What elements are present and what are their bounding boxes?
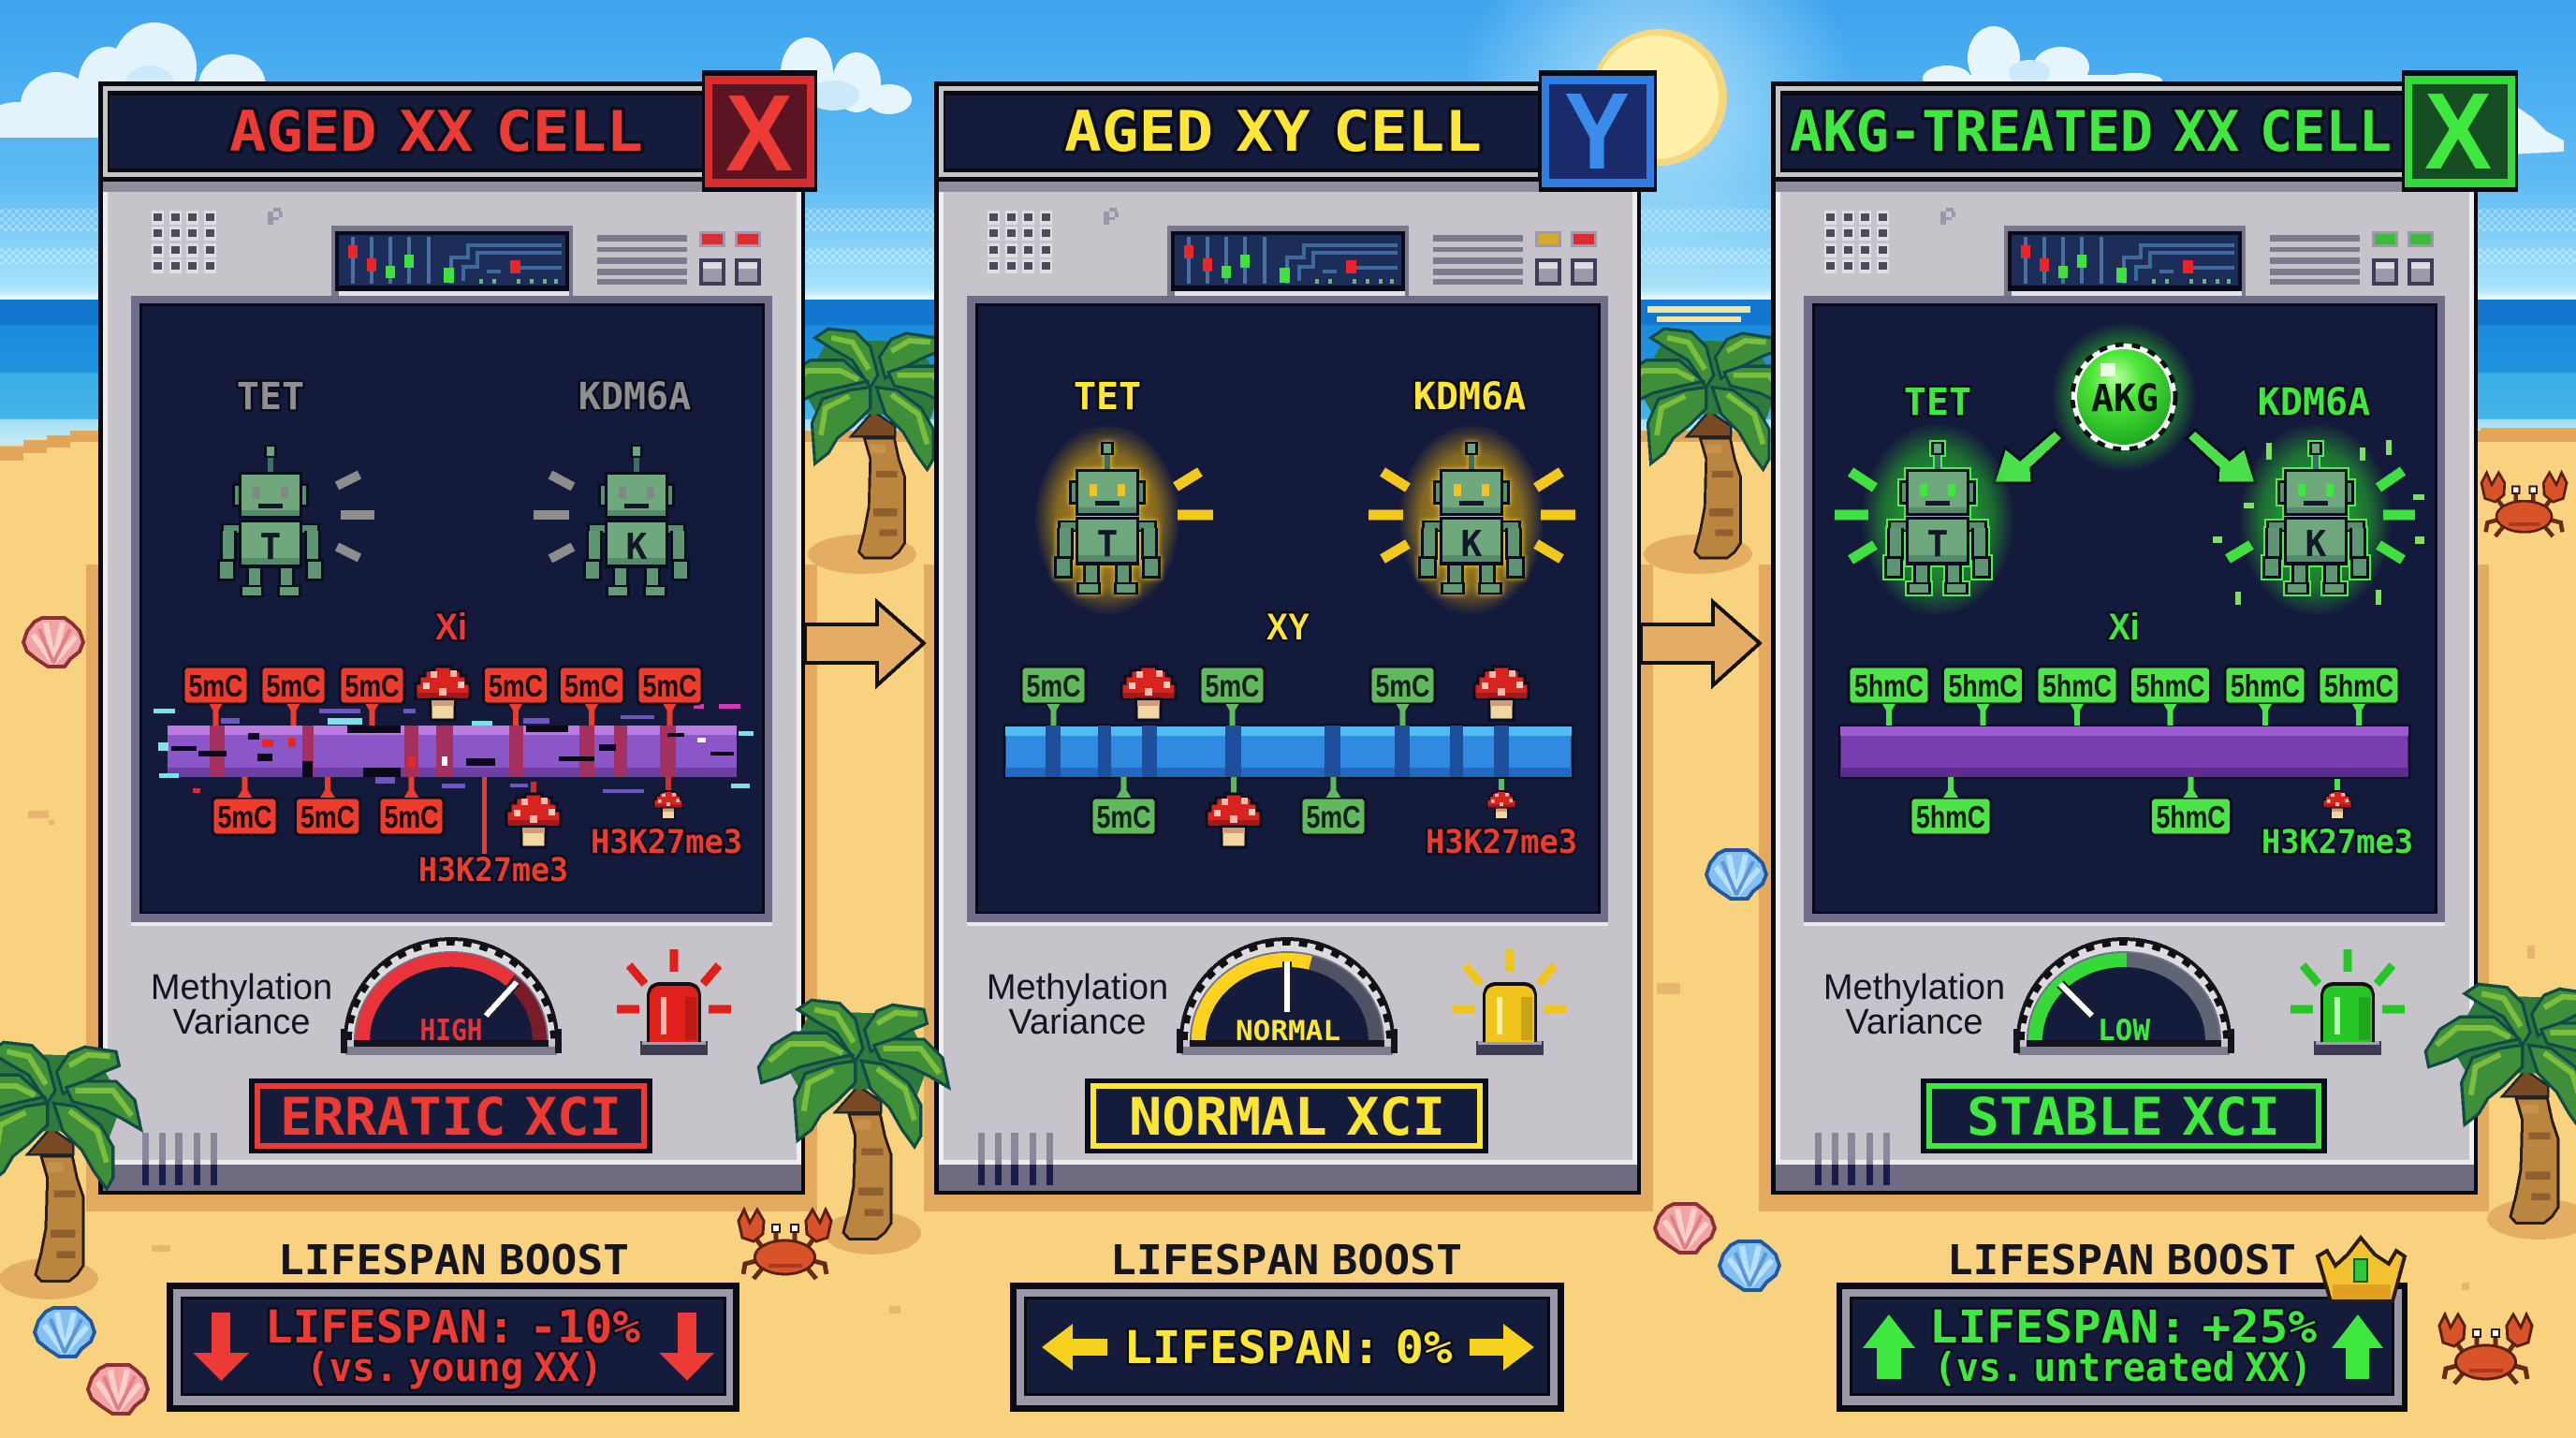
crab: right lower — [2439, 1314, 2532, 1384]
robot: TET — [1861, 422, 2014, 617]
top 5mC tags and mushroom: 5mC — [564, 668, 619, 703]
top 5mC tags and mushroom: 5mC — [189, 668, 243, 703]
label: methylation variance — [151, 968, 332, 1042]
robot: KDM6A — [1398, 424, 1544, 615]
status LEDs — [2372, 231, 2434, 247]
label: methylation variance: Methylation — [1823, 968, 2005, 1007]
shell: pink lower left — [88, 1365, 148, 1414]
alarm lamp: green — [2291, 949, 2405, 1055]
title bar — [934, 81, 1543, 182]
status: normal XCI: NORMAL XCI — [1129, 1087, 1445, 1147]
panel: AKG-treated XX cell — [1771, 70, 2518, 1412]
bottom 5mC tags, mushrooms and H3K27me3 labels — [212, 777, 742, 889]
title text: AKG-TREATED XX CELL — [1790, 99, 2392, 165]
label: methylation variance: Variance — [172, 1003, 311, 1042]
weak activity rays — [337, 475, 573, 559]
badge: X — [2402, 70, 2518, 192]
panel chassis — [1771, 178, 2478, 1195]
heading: lifespan boost: LIFESPAN BOOST — [1947, 1237, 2296, 1284]
AKG orb: AKG — [2091, 377, 2159, 420]
palm tree: foreground left — [0, 1042, 141, 1299]
label: methylation variance — [1823, 968, 2005, 1042]
shell: blue centre right — [1706, 850, 1766, 899]
label: methylation variance — [987, 968, 1168, 1042]
panel: aged XX cell — [98, 70, 817, 1412]
badge: Y — [1539, 70, 1657, 192]
cloud: top centre-left — [769, 37, 912, 114]
arrow: panel 2 to panel 3 — [1641, 602, 1760, 685]
gauge: normal: NORMAL — [1236, 1015, 1340, 1047]
bottom 5mC tags, mushrooms and H3K27me3 labels: 5mC — [300, 800, 355, 834]
enzyme label: KDM6A: KDM6A — [1413, 375, 1526, 418]
glitched chromosome bar — [154, 704, 754, 793]
arrow: AKG to KDM6A — [2187, 430, 2256, 483]
top 5mC tags and mushroom: 5mC — [489, 668, 543, 703]
chromosome label: XY: XY — [1266, 607, 1310, 648]
robot: TET: T — [260, 526, 281, 567]
enzyme label: TET: TET — [1904, 381, 1971, 424]
robot: KDM6A: K — [2305, 523, 2327, 565]
icon: crown — [2318, 1238, 2405, 1301]
panel: aged XY cell — [934, 70, 1657, 1412]
top 5mC tags and mushroom: 5mC — [344, 668, 399, 703]
top 5hmC tags: 5hmC — [2042, 668, 2112, 703]
sand specks — [28, 811, 2535, 1313]
lifespan readout: LIFESPAN: 0% — [1123, 1322, 1453, 1374]
bottom 5mC tags, mushrooms and H3K27me3 label: 5mC — [1307, 800, 1361, 834]
panel ground shadows — [86, 565, 2489, 1211]
top 5mC tags and mushrooms: 5mC — [1206, 668, 1260, 703]
bottom 5mC tags, mushrooms and H3K27me3 labels: H3K27me3 — [591, 824, 742, 861]
bottom 5hmC tags, mushroom and H3K27me3 label: 5hmC — [1916, 800, 1985, 834]
top 5hmC tags: 5hmC — [2231, 668, 2300, 703]
lifespan readout — [167, 1283, 739, 1412]
status: stable XCI — [1921, 1078, 2327, 1153]
enzyme label: KDM6A: KDM6A — [578, 375, 691, 418]
lifespan readout: LIFESPAN: -10% — [265, 1301, 640, 1354]
alarm lamp: yellow — [1453, 949, 1567, 1055]
status: erratic XCI: ERRATIC XCI — [280, 1087, 622, 1147]
chromosome label: Xi: Xi — [435, 607, 467, 648]
label: methylation variance: Variance — [1008, 1003, 1147, 1042]
palm tree: behind panels left — [778, 329, 960, 574]
chromosome bar: purple — [1839, 726, 2409, 777]
robot: TET — [1034, 424, 1180, 615]
robot: KDM6A: K — [626, 526, 648, 567]
robot: TET — [217, 445, 324, 597]
bottom 5mC tags, mushrooms and H3K27me3 label — [1091, 777, 1577, 861]
label: methylation variance: Methylation — [151, 968, 332, 1007]
palm tree: behind panels right — [1614, 329, 1796, 574]
alarm lamp: red — [617, 949, 731, 1055]
bottom 5mC tags, mushrooms and H3K27me3 labels: 5mC — [384, 800, 438, 834]
bottom 5hmC tags, mushroom and H3K27me3 label — [1910, 777, 2413, 861]
panel chassis — [98, 178, 805, 1195]
heading: lifespan boost: LIFESPAN BOOST — [278, 1237, 629, 1284]
status LEDs — [1535, 231, 1597, 247]
bottom 5hmC tags, mushroom and H3K27me3 label: 5hmC — [2157, 800, 2226, 834]
bottom 5hmC tags, mushroom and H3K27me3 label: H3K27me3 — [2261, 824, 2413, 861]
top 5hmC tags — [1849, 667, 2399, 726]
panel chassis — [934, 178, 1641, 1195]
robot: TET: T — [1927, 523, 1948, 565]
status LEDs — [699, 231, 761, 247]
status: stable XCI: STABLE XCI — [1967, 1087, 2280, 1147]
bottom 5mC tags, mushrooms and H3K27me3 labels: H3K27me3 — [418, 852, 568, 889]
label: methylation variance: Variance — [1845, 1003, 1983, 1042]
background: sky — [0, 0, 2576, 297]
gauge: normal — [1177, 937, 1398, 1055]
enzyme label: TET: TET — [1074, 375, 1141, 418]
status: erratic XCI — [249, 1078, 652, 1153]
enzyme label: TET: TET — [237, 375, 304, 418]
lifespan readout — [1010, 1283, 1564, 1412]
gauge: high: HIGH — [419, 1014, 483, 1048]
robot: KDM6A — [583, 445, 690, 597]
top 5mC tags and mushroom: 5mC — [266, 668, 320, 703]
palm tree: foreground right — [2425, 984, 2576, 1240]
enzyme label: KDM6A: KDM6A — [2258, 381, 2370, 424]
label: methylation variance: Methylation — [987, 968, 1168, 1007]
gauge: high — [341, 937, 562, 1055]
top 5hmC tags: 5hmC — [1854, 668, 1924, 703]
shell: blue lower left — [35, 1308, 95, 1357]
robot: TET: T — [1097, 523, 1118, 565]
shell: blue centre bottom — [1720, 1241, 1779, 1290]
shell: pink centre bottom — [1655, 1204, 1715, 1253]
cloud: top right — [1923, 26, 2162, 92]
crab: right upper — [2481, 473, 2567, 536]
top 5mC tags and mushrooms: 5mC — [1026, 668, 1080, 703]
gauge: low — [2013, 937, 2234, 1055]
title bar — [1771, 81, 2408, 182]
top 5mC tags and mushroom: 5mC — [642, 668, 696, 703]
arrow: panel 1 to panel 2 — [805, 602, 924, 685]
activity rays and sparks — [1835, 440, 2424, 605]
sea — [0, 300, 2576, 445]
activity rays — [1176, 472, 1575, 559]
top 5hmC tags: 5hmC — [2136, 668, 2205, 703]
palm tree: foreground centre — [758, 1000, 949, 1255]
heading: lifespan boost: LIFESPAN BOOST — [1110, 1237, 1462, 1284]
crab: centre — [739, 1210, 831, 1279]
bottom 5mC tags, mushrooms and H3K27me3 label: H3K27me3 — [1426, 824, 1577, 861]
robot: KDM6A: K — [1461, 523, 1483, 565]
horizon line — [0, 296, 2576, 301]
top 5mC tags and mushrooms: 5mC — [1376, 668, 1430, 703]
badge: X: X — [2424, 70, 2492, 192]
sun reflection on sea — [1647, 306, 1750, 322]
bottom 5mC tags, mushrooms and H3K27me3 labels: 5mC — [217, 800, 271, 834]
cloud: top left — [0, 22, 271, 138]
sand — [0, 428, 2576, 1438]
sand beach body — [0, 442, 2576, 1438]
badge: X: X — [725, 72, 793, 194]
arrow: AKG to TET — [1994, 430, 2063, 483]
chromosome label: Xi: Xi — [2108, 607, 2140, 648]
AKG orb — [2051, 322, 2197, 472]
bottom 5mC tags, mushrooms and H3K27me3 label: 5mC — [1097, 800, 1151, 834]
lifespan readout: (vs. untreated XX) — [1934, 1344, 2312, 1390]
lifespan readout: LIFESPAN: +25% — [1929, 1301, 2317, 1354]
title text: AGED XY CELL — [1064, 99, 1482, 165]
status: normal XCI — [1085, 1078, 1488, 1153]
top 5mC tags and mushroom — [183, 667, 702, 726]
badge: X — [702, 70, 817, 194]
cloud: right edge — [2509, 101, 2564, 154]
title text: AGED XX CELL — [229, 99, 643, 165]
robot: KDM6A — [2239, 422, 2393, 617]
badge: Y: Y — [1564, 70, 1630, 192]
lifespan readout — [1837, 1283, 2408, 1412]
top 5hmC tags: 5hmC — [2324, 668, 2393, 703]
chromosome bar: blue — [1004, 726, 1573, 777]
lifespan readout: (vs. young XX) — [306, 1344, 603, 1390]
title bar — [98, 81, 707, 182]
top 5hmC tags: 5hmC — [1949, 668, 2018, 703]
gauge: low: LOW — [2098, 1014, 2150, 1048]
background: dithered sky bands — [0, 209, 2576, 264]
top 5mC tags and mushrooms — [1021, 667, 1529, 726]
shell: pink upper left — [23, 618, 83, 667]
sun — [1460, 0, 1853, 292]
